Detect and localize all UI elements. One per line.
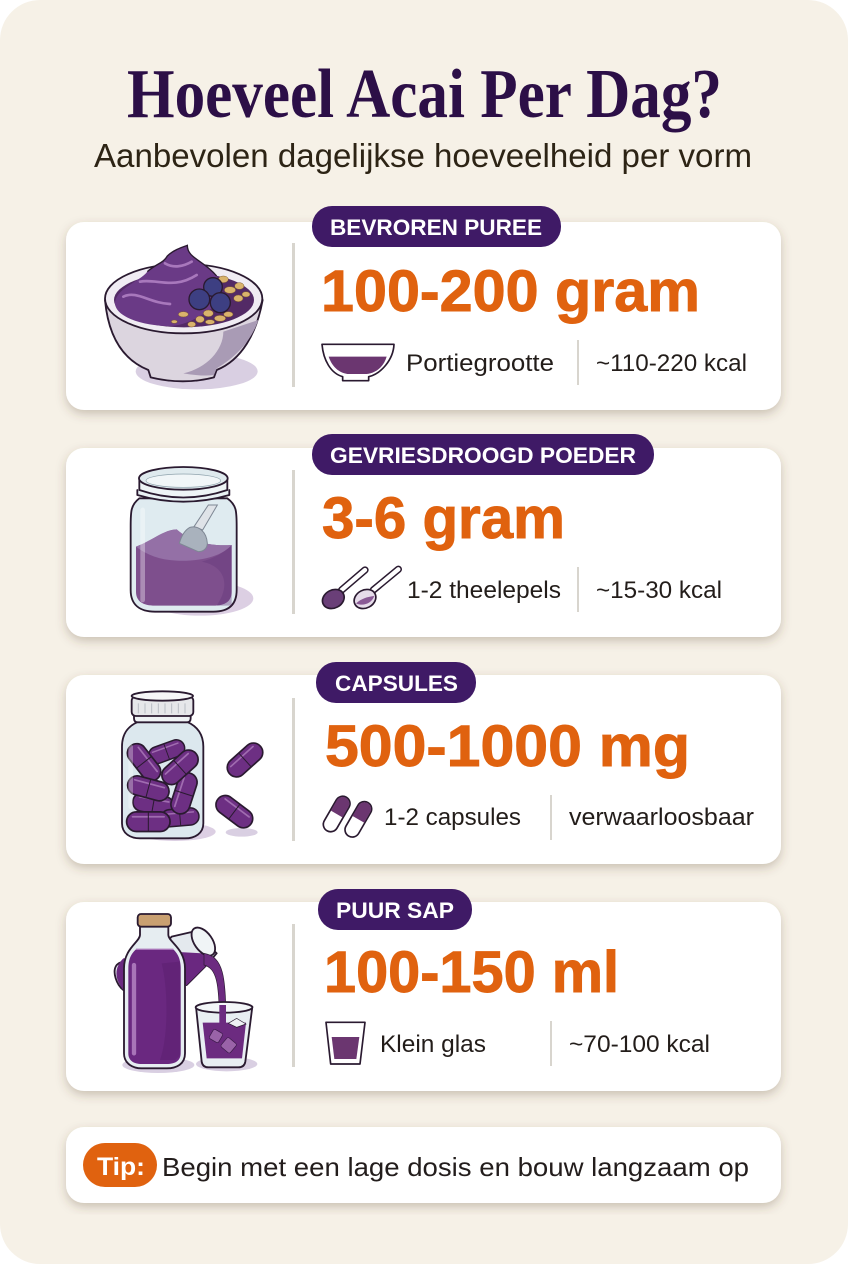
- amount: 500-1000 mg: [325, 714, 690, 779]
- pill label: [312, 206, 561, 247]
- granola: [171, 276, 250, 327]
- icon: powder jar: [131, 467, 253, 616]
- separator: [577, 567, 579, 612]
- pill label: BEVROREN PUREE: [330, 215, 542, 240]
- front bottle: [124, 925, 185, 1068]
- jar highlight: [124, 747, 138, 807]
- pill label: [312, 434, 654, 475]
- stream: [204, 953, 226, 1023]
- subtitle: Aanbevolen dagelijkse hoeveelheid per vorm: [94, 137, 752, 174]
- separator: [577, 340, 579, 385]
- amount: 3-6 gram: [322, 486, 565, 551]
- separator: [550, 1021, 552, 1066]
- capsules inside jar: [124, 737, 202, 831]
- icon: small bowl: [322, 344, 394, 381]
- amount: 100-200 gram: [321, 259, 700, 324]
- portion text: 1-2 theelepels: [407, 577, 561, 604]
- panel: bevroren puree: [66, 206, 781, 410]
- icon: two small capsules: [321, 794, 374, 840]
- portion text: 1-2 capsules: [384, 804, 521, 831]
- panel: tip: [66, 1127, 781, 1203]
- loose capsules: [223, 739, 267, 781]
- icon: capsule jar: [122, 691, 267, 841]
- tip badge: Tip:: [97, 1153, 145, 1181]
- panel: puur sap: [66, 889, 781, 1091]
- title: Hoeveel Acai Per Dag?: [127, 56, 722, 133]
- blueberries: [189, 278, 230, 313]
- portion text: Klein glas: [380, 1031, 486, 1058]
- calories: verwaarloosbaar: [569, 804, 754, 831]
- panel: capsules: [66, 662, 781, 864]
- pill label: CAPSULES: [335, 671, 458, 696]
- icon: juice bottles and glass: [115, 914, 257, 1073]
- portion text: Portiegrootte: [406, 350, 554, 377]
- back pouring bottle: [115, 932, 217, 990]
- pill label: GEVRIESDROOGD POEDER: [330, 443, 636, 468]
- pill label: [316, 662, 476, 703]
- icon: small glass: [326, 1022, 365, 1064]
- pill label: PUUR SAP: [336, 898, 454, 923]
- icon: acai bowl: [105, 245, 263, 389]
- glass: [196, 1007, 252, 1067]
- calories: ~70-100 kcal: [569, 1031, 710, 1058]
- separator: [550, 795, 552, 840]
- calories: ~110-220 kcal: [596, 350, 747, 377]
- amount: 100-150 ml: [324, 940, 619, 1005]
- tip text: Begin met een lage dosis en bouw langzaam op: [162, 1152, 749, 1182]
- pill label: [318, 889, 472, 930]
- panel: gevriesdroogd poeder: [66, 434, 781, 637]
- tip badge: [83, 1143, 157, 1187]
- calories: ~15-30 kcal: [596, 577, 722, 604]
- icon: two teaspoons: [319, 569, 398, 612]
- scoop: [179, 505, 217, 552]
